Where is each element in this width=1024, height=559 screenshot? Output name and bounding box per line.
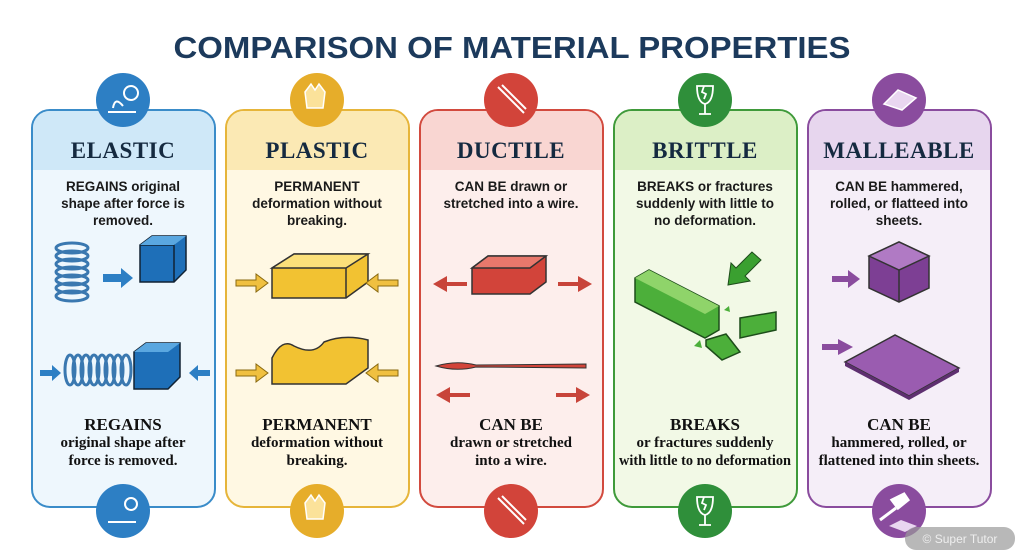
icon: broken glass bottom bbox=[678, 484, 732, 538]
text: plastic bottom: deformation without bbox=[251, 435, 383, 451]
heading: malleable: MALLEABLE bbox=[823, 138, 975, 163]
title: COMPARISON OF MATERIAL PROPERTIES bbox=[174, 30, 850, 65]
heading: elastic: ELASTIC bbox=[71, 138, 175, 163]
text: elastic description: removed. bbox=[93, 213, 153, 228]
icon: bouncing ball bottom bbox=[96, 484, 150, 538]
text: malleable description: sheets. bbox=[876, 213, 922, 228]
text: brittle bottom: with little to no deformation bbox=[619, 453, 792, 469]
icon: plastic bag top bbox=[290, 73, 344, 127]
text: elastic description bbox=[61, 179, 185, 228]
text: brittle bottom: BREAKS bbox=[670, 415, 740, 434]
text: brittle bottom: or fractures suddenly bbox=[637, 435, 774, 451]
text: plastic description: PERMANENT bbox=[274, 179, 360, 194]
text: brittle description: BREAKS or fractures bbox=[637, 179, 773, 194]
icon: plastic bag bottom bbox=[290, 484, 344, 538]
text: malleable description: rolled, or flatteed into bbox=[830, 196, 968, 211]
panel: brittle bbox=[614, 73, 797, 538]
text: ductile description: CAN BE drawn or bbox=[455, 179, 568, 194]
text: elastic bottom bbox=[60, 415, 186, 469]
illustration: breaking green bar bbox=[635, 252, 776, 360]
text: malleable bottom: hammered, rolled, or bbox=[831, 435, 967, 451]
panel: ductile bbox=[420, 73, 603, 538]
illustration: wire bbox=[436, 363, 590, 403]
text: elastic description: REGAINS original bbox=[66, 179, 180, 194]
text: malleable bottom: flattened into thin sheets. bbox=[819, 453, 980, 469]
illustration: spring and cube bbox=[56, 236, 186, 301]
illustration: purple cube bbox=[832, 242, 929, 302]
text: plastic bottom bbox=[251, 415, 383, 469]
icon: stretch top bbox=[484, 73, 538, 127]
illustration: compressed spring and cube bbox=[40, 343, 210, 389]
text: brittle description: no deformation. bbox=[654, 213, 756, 228]
panel: plastic bbox=[226, 73, 409, 538]
heading: brittle: BRITTLE bbox=[652, 138, 758, 163]
illustration: deformed yellow block bbox=[236, 337, 398, 384]
text: plastic description bbox=[252, 179, 382, 228]
watermark: © Super Tutor bbox=[923, 532, 997, 546]
text: brittle description: suddenly with little to bbox=[636, 196, 774, 211]
text: ductile bottom: CAN BE bbox=[479, 415, 543, 434]
heading: plastic: PLASTIC bbox=[265, 138, 369, 163]
illustration: purple sheet bbox=[822, 335, 959, 400]
watermark bbox=[905, 527, 1015, 550]
icon: bouncing ball top bbox=[96, 73, 150, 127]
icon: stretch bottom bbox=[484, 484, 538, 538]
text: plastic description: deformation without bbox=[252, 196, 382, 211]
text: ductile description bbox=[443, 179, 579, 211]
text: ductile bottom: drawn or stretched bbox=[450, 435, 573, 451]
text: ductile description: stretched into a wire. bbox=[443, 196, 579, 211]
text: brittle description bbox=[636, 179, 774, 228]
icon: sheet top bbox=[872, 73, 926, 127]
icon: broken glass top bbox=[678, 73, 732, 127]
panel: malleable bbox=[808, 73, 991, 538]
text: ductile bottom: into a wire. bbox=[475, 453, 547, 469]
text: plastic bottom: breaking. bbox=[286, 453, 348, 469]
text: elastic bottom: REGAINS bbox=[84, 415, 162, 434]
text: elastic bottom: force is removed. bbox=[68, 453, 178, 469]
panel: elastic bbox=[32, 73, 215, 538]
text: malleable description bbox=[830, 179, 968, 228]
illustration: red bar with arrows bbox=[433, 256, 592, 294]
illustration: yellow block with arrows bbox=[236, 254, 398, 298]
text: malleable bottom: CAN BE bbox=[867, 415, 931, 434]
text: plastic description: breaking. bbox=[287, 213, 347, 228]
text: malleable bottom bbox=[819, 415, 980, 469]
text: ductile bottom bbox=[450, 415, 573, 469]
heading: ductile: DUCTILE bbox=[457, 138, 565, 163]
text: malleable description: CAN BE hammered, bbox=[835, 179, 963, 194]
icon: hammer bottom bbox=[872, 484, 926, 538]
text: elastic bottom: original shape after bbox=[60, 435, 186, 451]
text: elastic description: shape after force is bbox=[61, 196, 185, 211]
text: plastic bottom: PERMANENT bbox=[262, 415, 372, 434]
text: brittle bottom bbox=[619, 415, 792, 469]
